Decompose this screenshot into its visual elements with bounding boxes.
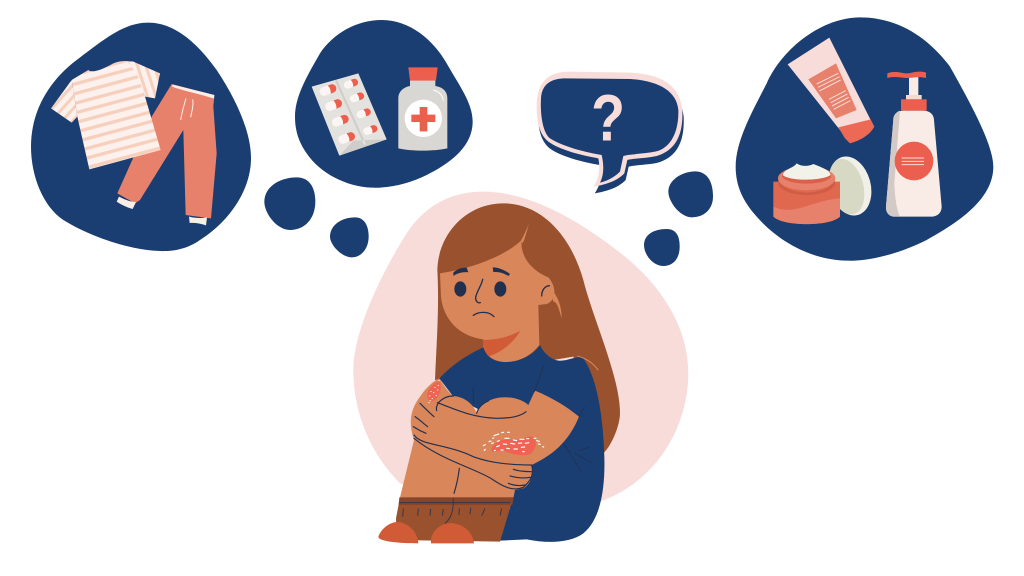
arm, hand and body contour lines — [413, 396, 533, 493]
thought dot: small left — [330, 217, 369, 257]
icon: cream jar with lid — [773, 156, 872, 224]
thought bubble: medicine — [295, 20, 473, 188]
sleeve creases — [473, 367, 591, 471]
shorts — [396, 497, 514, 542]
t-shirt — [439, 345, 604, 542]
hair strand on shoulder — [577, 356, 598, 370]
speech bubble with question mark — [537, 72, 684, 193]
thought dot: small right — [644, 229, 680, 266]
pink background blob — [353, 192, 688, 510]
icon: striped t-shirt — [51, 61, 161, 169]
illustration: worried girl with skin rash — [353, 192, 688, 543]
panel: question and skincare thoughts — [537, 17, 993, 266]
rash on knee — [427, 381, 441, 403]
thought bubble: skincare — [736, 17, 993, 261]
icon: cream tube — [788, 38, 874, 143]
icon: blister pack — [312, 73, 387, 156]
thought dot: large right — [668, 171, 713, 217]
shoes — [378, 522, 474, 543]
icon: medicine bottle — [398, 67, 447, 151]
icon: pump bottle — [886, 72, 942, 217]
thought bubble: clothing — [31, 23, 251, 251]
face and neck — [440, 223, 562, 362]
facial features — [453, 267, 549, 317]
icon: pants — [117, 84, 217, 225]
rash on arm — [483, 432, 544, 455]
body: legs and arm — [400, 378, 579, 498]
hair — [435, 203, 620, 453]
panel: clothing and medicine thoughts — [31, 20, 473, 257]
thought dot: large left — [264, 177, 315, 230]
question mark: ? — [591, 81, 625, 154]
